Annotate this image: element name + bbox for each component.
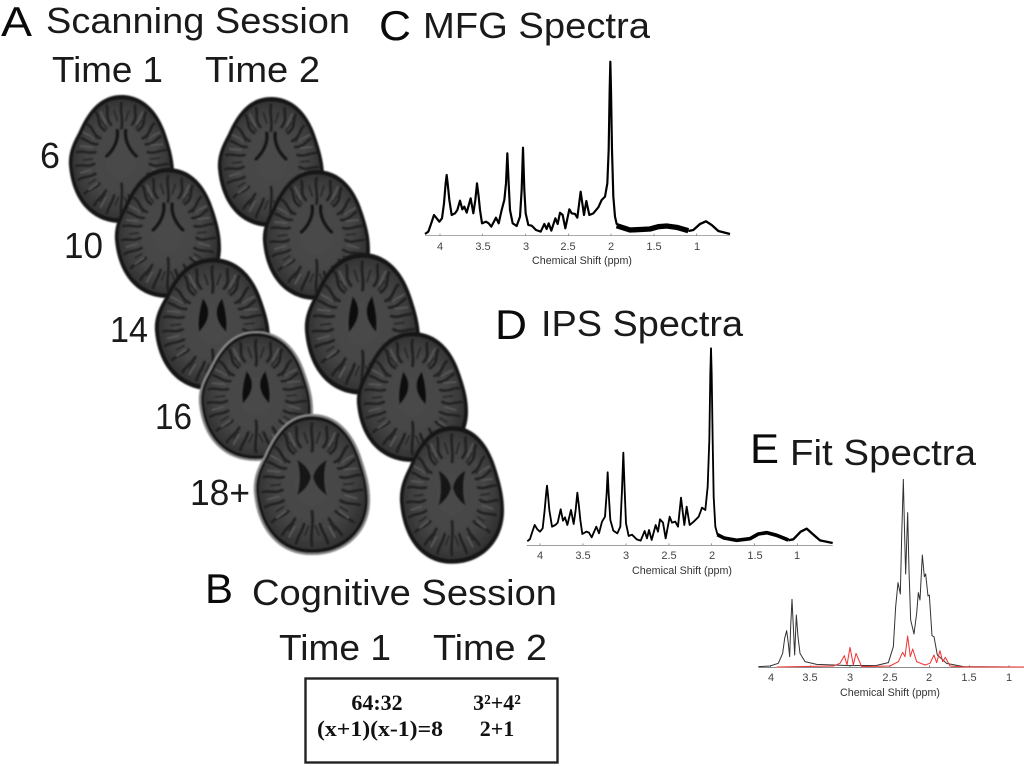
- panel letter B: B: [205, 565, 233, 612]
- math problems box: 2+1: [480, 716, 514, 741]
- spectrum chart: MFG: 2: [608, 241, 614, 253]
- spectrum chart: MFG: 1.5: [646, 241, 662, 253]
- brain scan: age 18+, time 1: [255, 415, 369, 554]
- brain scan: age 14, time 1: [155, 258, 270, 391]
- spectrum chart: IPS: 2: [709, 550, 715, 562]
- panel letter C: C: [379, 2, 411, 49]
- spectrum chart: fit: 3.5: [802, 672, 818, 684]
- age label 14: 14: [110, 309, 148, 350]
- panel letter E: E: [750, 425, 779, 472]
- spectrum chart: IPS: Chemical Shift (ppm): [632, 565, 732, 577]
- brain scan: age 18+, time 2: [400, 426, 504, 564]
- spectrum chart: MFG: 2.5: [560, 241, 576, 253]
- math problems box: [306, 678, 558, 762]
- column label: time 2: Time 2: [205, 49, 320, 90]
- age label 16: 16: [155, 396, 192, 437]
- spectrum chart: MFG: Chemical Shift (ppm): [532, 255, 632, 267]
- spectrum chart: MFG: 3.5: [475, 241, 491, 253]
- brain scan: age 6, time 1: [69, 95, 174, 223]
- panel letter D: D: [495, 301, 527, 348]
- spectrum chart: IPS: 3: [623, 550, 629, 562]
- column label: time 1: Time 1: [279, 627, 391, 668]
- spectrum chart: IPS: 2.5: [661, 550, 677, 562]
- age label 6: 6: [40, 135, 60, 176]
- spectrum chart: fit: Chemical Shift (ppm): [840, 687, 940, 699]
- panel: scanning session: [1, 0, 504, 564]
- spectrum chart: fit: 1: [1006, 672, 1012, 684]
- brain scan: age 6, time 2: [218, 97, 324, 227]
- spectrum chart: IPS: 3.5: [575, 550, 591, 562]
- brain scan: age 16, time 1: [200, 332, 312, 460]
- heading: MFG spectra: MFG Spectra: [423, 5, 651, 46]
- age label 10: 10: [64, 225, 103, 266]
- heading: cognitive session: Cognitive Session: [252, 572, 557, 613]
- spectrum chart: fit: [758, 479, 1024, 699]
- spectrum chart: MFG: 4: [437, 241, 443, 253]
- spectrum chart: IPS: [527, 348, 833, 577]
- brain scan: age 16, time 2: [357, 332, 468, 462]
- math problems box: (x+1)(x-1)=8: [317, 716, 443, 741]
- panel: MFG spectra: [379, 2, 730, 267]
- panel: cognitive session: [205, 565, 558, 762]
- panel: fit spectra: [750, 425, 1024, 699]
- column label: time 2: Time 2: [433, 627, 547, 668]
- spectrum chart: MFG: 1: [694, 241, 700, 253]
- math problems box: 3²+4²: [473, 690, 521, 715]
- math problems box: 64:32: [351, 690, 403, 715]
- age label 18+: 18+: [190, 472, 250, 513]
- panel: IPS spectra: [495, 301, 833, 577]
- spectrum chart: fit: 3: [847, 672, 853, 684]
- brain scan: age 14, time 2: [305, 253, 420, 395]
- spectrum chart: fit: 2.5: [882, 672, 898, 684]
- heading: IPS spectra: IPS Spectra: [541, 303, 744, 344]
- spectrum chart: fit: 4: [768, 672, 774, 684]
- spectrum chart: IPS: 1: [794, 550, 800, 562]
- spectrum chart: IPS: 1.5: [747, 550, 763, 562]
- spectrum chart: fit: 1.5: [961, 672, 977, 684]
- column label: time 1: Time 1: [52, 49, 163, 90]
- spectrum chart: fit: 2: [926, 672, 932, 684]
- spectrum chart: IPS: 4: [537, 550, 543, 562]
- spectrum chart: MFG: 3: [523, 241, 529, 253]
- heading: fit spectra: Fit Spectra: [790, 432, 977, 473]
- brain scan: age 10, time 1: [115, 168, 221, 298]
- heading: scanning session: Scanning Session: [46, 0, 350, 41]
- brain scan: age 10, time 2: [263, 170, 370, 300]
- spectrum chart: MFG: [425, 62, 730, 267]
